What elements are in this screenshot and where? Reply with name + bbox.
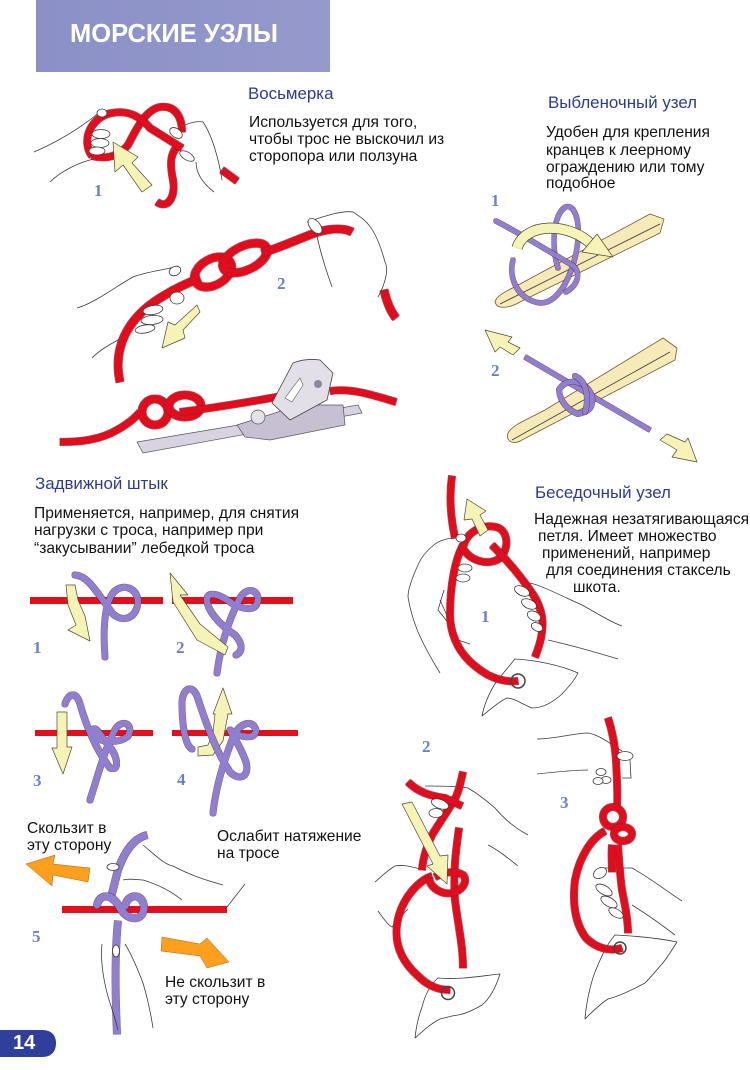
figure-eight step 2 illustration (77, 212, 396, 382)
section: sliding hitch text (34, 474, 299, 557)
callout: slides this way (27, 820, 111, 854)
section: rolling hitch for fender text: кранцев к леерному (546, 142, 691, 159)
sliding hitch step 4: 4 (177, 770, 186, 789)
callout: loosens tension: Ослабит натяжение (217, 828, 361, 845)
section: figure-eight knot text: сторопора или ползуна (249, 148, 418, 165)
sliding hitch step 5 with hands (26, 835, 245, 1034)
callout: does not slide (165, 974, 265, 1008)
clove hitch step 2 illustration: 2 (491, 361, 500, 380)
section: bowline text: шкота. (573, 579, 621, 596)
section: rolling hitch for fender text (546, 93, 710, 192)
sliding hitch step 2 (170, 573, 293, 673)
clove hitch step 1 illustration: 1 (491, 191, 500, 210)
section: sliding hitch text: Задвижной штык (35, 474, 168, 493)
figure-eight step 1 illustration (34, 107, 237, 204)
callout: loosens tension (217, 828, 361, 862)
figure-eight step 3 illustration with slider (60, 359, 396, 453)
section: bowline text: петля. Имеет множество (538, 528, 717, 545)
section: bowline text: Беседочный узел (535, 483, 671, 502)
callout: slides this way: Скользит в (27, 820, 106, 837)
clove hitch step 2 illustration (485, 330, 697, 462)
section: rolling hitch for fender text: Выбленочный узел (548, 93, 697, 112)
section: rolling hitch for fender text: ограждению или тому (546, 159, 705, 176)
section: bowline text: применений, например (542, 545, 711, 562)
sliding hitch step 3: 3 (33, 771, 42, 790)
bowline step 2 illustration (375, 737, 528, 1038)
callout: does not slide: эту сторону (165, 991, 249, 1008)
page number badge (0, 1030, 56, 1057)
section: figure-eight knot text: Используется для того, (249, 114, 417, 131)
bowline step 3 illustration (537, 718, 682, 1019)
callout: loosens tension: на тросе (217, 845, 280, 862)
section: rolling hitch for fender text: Удобен для крепления (546, 124, 710, 141)
sliding hitch step 5 with hands: 5 (32, 927, 40, 946)
bowline step 3 illustration: 3 (560, 793, 568, 812)
sliding hitch step 3 (33, 695, 153, 800)
header banner with title (36, 0, 330, 72)
section: bowline text: для соединения стаксель (546, 562, 731, 579)
section: bowline text: Надежная незатягивающаяся (534, 511, 749, 528)
header banner with title: МОРСКИЕ УЗЛЫ (70, 20, 278, 48)
figure-eight step 2 illustration: 2 (277, 274, 286, 293)
bowline step 1 illustration: 1 (481, 607, 490, 626)
section: figure-eight knot text: Восьмерка (248, 84, 334, 103)
sliding hitch step 1: 1 (33, 638, 42, 657)
bowline step 2 illustration: 2 (422, 737, 430, 756)
section: sliding hitch text: “закусывании” лебедкой троса (34, 540, 255, 557)
section: bowline text (534, 483, 749, 596)
bowline step 1 illustration (408, 476, 622, 716)
sliding hitch step 1 (30, 575, 163, 657)
figure-eight step 1 illustration: 1 (94, 181, 102, 200)
callout: does not slide: Не скользит в (165, 974, 265, 991)
section: rolling hitch for fender text: подобное (546, 175, 615, 192)
section: sliding hitch text: Применяется, например, для снятия (34, 505, 299, 522)
clove hitch step 1 illustration (491, 191, 664, 307)
page number badge: 14 (13, 1032, 36, 1054)
callout: slides this way: эту сторону (27, 837, 111, 854)
sliding hitch step 4 (172, 688, 298, 813)
sliding hitch step 2: 2 (176, 638, 184, 657)
section: figure-eight knot text: чтобы трос не выскочил из (249, 131, 444, 148)
section: figure-eight knot text (248, 84, 444, 165)
section: sliding hitch text: нагрузки с троса, например при (34, 522, 263, 539)
